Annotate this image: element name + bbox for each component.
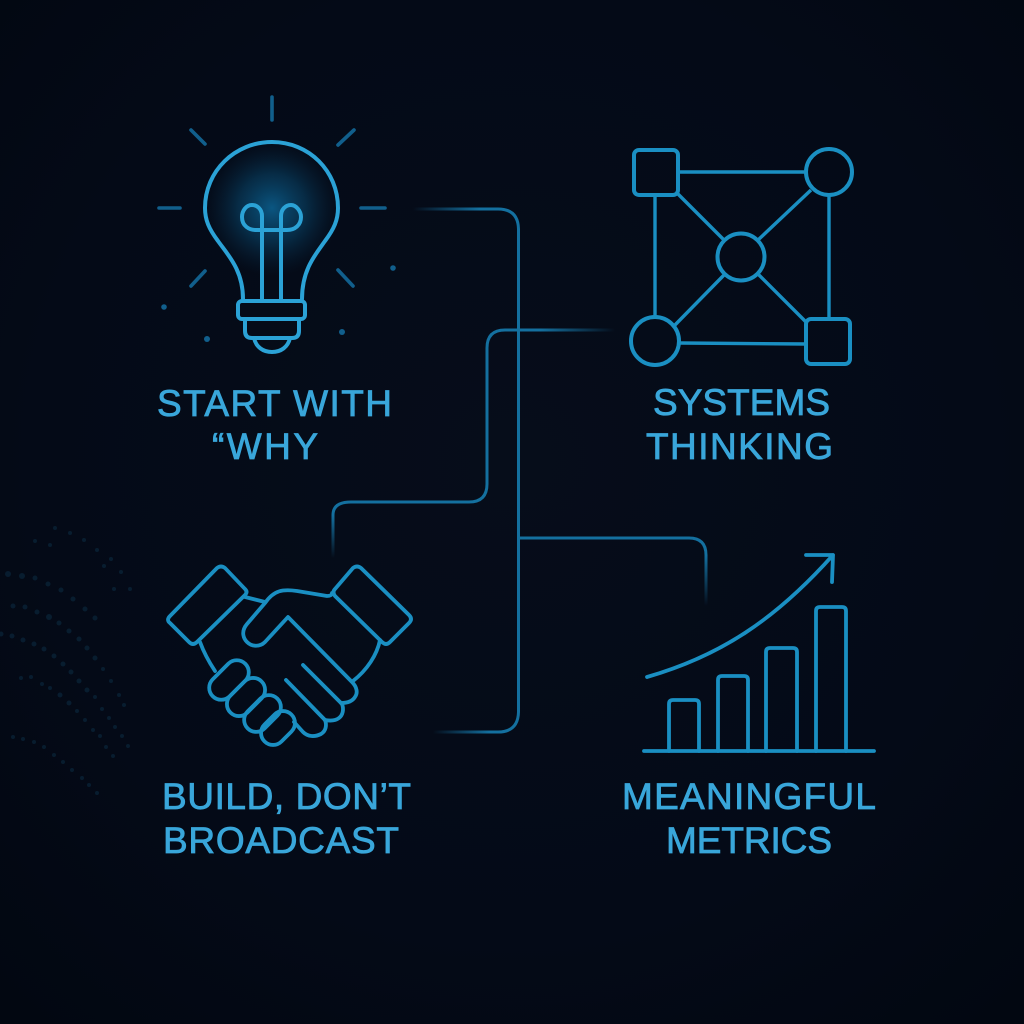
network links (655, 172, 829, 344)
label: meaningful metrics: METRICS (666, 820, 832, 861)
left cuff (168, 566, 246, 644)
label: systems thinking: SYSTEMS (653, 382, 830, 423)
arms and hand (200, 597, 380, 681)
light rays (159, 97, 385, 286)
bulb base (238, 301, 305, 319)
connector: systems to build (333, 330, 615, 558)
nodes (634, 150, 678, 195)
icon: systems network (631, 149, 852, 365)
label: meaningful metrics: MEANINGFUL (622, 776, 876, 817)
icon: bar chart with arrow (644, 555, 874, 751)
label: start with why (157, 383, 392, 467)
label: systems thinking (646, 382, 833, 467)
icon: handshake (168, 566, 411, 750)
label: build, don't broadcast: BROADCAST (163, 820, 399, 861)
label: build, don't broadcast (162, 776, 411, 861)
growth arrow (647, 555, 833, 677)
label: build, don't broadcast: BUILD, DON’T (162, 776, 411, 817)
sparkle dots (161, 265, 396, 342)
connector lines (333, 209, 706, 732)
baseline (644, 749, 874, 753)
label: systems thinking: THINKING (646, 426, 833, 467)
icon: light bulb (159, 97, 396, 352)
connector: hub to metrics (519, 538, 706, 606)
bulb glass (205, 142, 338, 299)
bulb glow (204, 140, 340, 276)
label: meaningful metrics (622, 776, 876, 861)
label: start with why: START WITH (157, 383, 392, 424)
label: start with why: “WHY (212, 426, 318, 467)
connector: why to build (413, 209, 518, 732)
right cuff (334, 566, 411, 644)
knuckles (204, 655, 254, 705)
bars (669, 700, 699, 751)
filament (242, 205, 301, 299)
